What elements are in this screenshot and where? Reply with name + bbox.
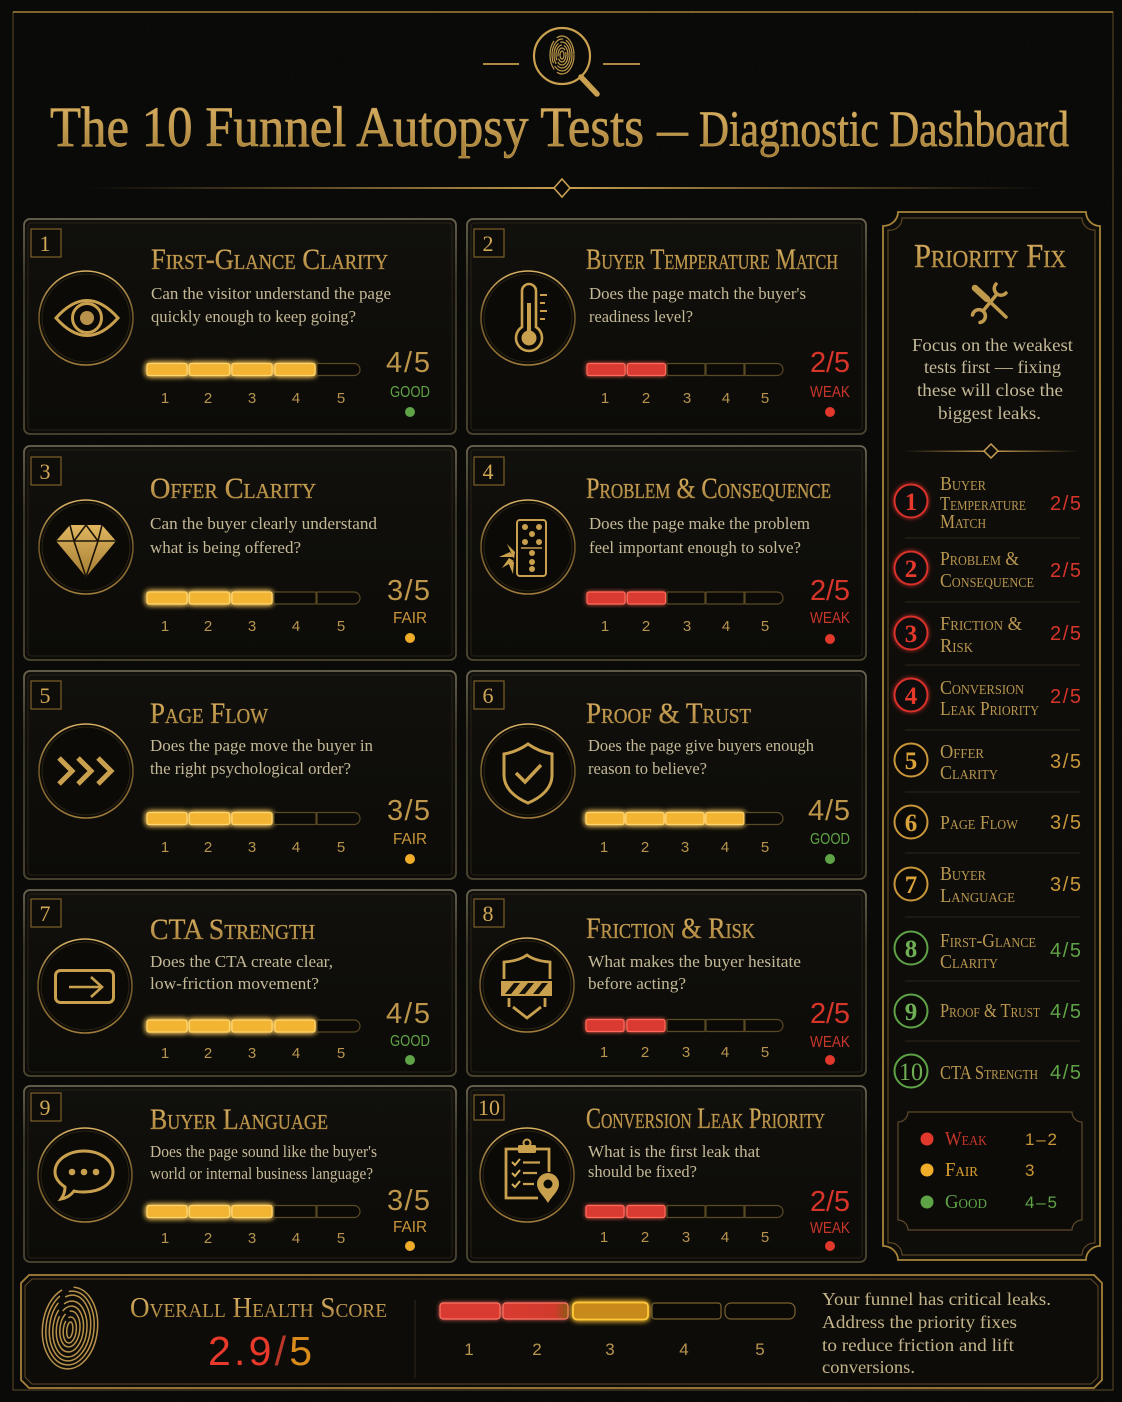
- score bar: 2: [204, 1230, 212, 1247]
- priority 3: [894, 613, 1081, 657]
- score bar: 2: [204, 839, 212, 856]
- priority 5: 3/5: [1050, 751, 1081, 773]
- heading: Friction & Risk: [586, 912, 755, 945]
- score: [387, 1185, 430, 1251]
- heading: Priority Fix: [914, 238, 1066, 275]
- score bar: 3: [248, 1230, 256, 1247]
- description: Does the CTA create clear,: [150, 952, 333, 971]
- heading: First-Glance Clarity: [151, 243, 388, 276]
- description: [589, 514, 810, 557]
- overall score bar: 3: [605, 1340, 615, 1359]
- score bar: 5: [337, 1045, 345, 1062]
- priority 9: [894, 994, 1081, 1028]
- card 1: First-Glance Clarity: [24, 219, 456, 434]
- priority 5: [894, 741, 1081, 784]
- score bar: 3: [682, 1044, 690, 1061]
- score bar: 5: [337, 390, 345, 407]
- priority 8: [894, 930, 1081, 973]
- score: 3/5: [387, 575, 430, 607]
- icon: crossed tools: [972, 284, 1006, 322]
- score: 2/5: [810, 347, 850, 379]
- summary text: [822, 1289, 1051, 1377]
- score bar: 4: [292, 1045, 300, 1062]
- icon: chevrons: [39, 724, 133, 818]
- heading: Buyer Temperature Match: [586, 243, 838, 276]
- overall score bar: 1: [464, 1340, 474, 1359]
- number badge: [474, 229, 504, 257]
- priority 7: Buyer: [940, 863, 987, 885]
- priority 6: Page Flow: [940, 812, 1019, 834]
- score bar: 3: [248, 1045, 256, 1062]
- priority 6: 6: [905, 810, 917, 837]
- card 10: Conversion Leak Priority: [467, 1086, 866, 1262]
- score bar: 3: [248, 618, 256, 635]
- score bar: [587, 592, 783, 635]
- priority 2: Consequence: [940, 570, 1034, 592]
- panel: overall health score: [21, 1275, 1102, 1388]
- priority 3: Risk: [940, 635, 973, 657]
- heading: Offer Clarity: [150, 472, 316, 505]
- score bar: 4: [292, 390, 300, 407]
- score: 4/5: [808, 795, 850, 827]
- score bar: 1: [600, 1044, 608, 1061]
- icon: fingerprint: [38, 1284, 102, 1372]
- priority 6: 3/5: [1050, 812, 1081, 834]
- description: Does the page sound like the buyer's: [150, 1142, 377, 1161]
- legend: Fair: [945, 1159, 979, 1181]
- score: FAIR: [393, 1219, 427, 1236]
- score: [386, 998, 430, 1065]
- score bar: 1: [601, 390, 609, 407]
- panel divider: [903, 444, 1080, 458]
- score: 3/5: [387, 1185, 430, 1217]
- score bar: 4: [721, 1044, 729, 1061]
- score bar: 1: [601, 618, 609, 635]
- score: 2/5: [810, 1186, 850, 1218]
- icon: clipboard with pin: [480, 1128, 574, 1222]
- score bar: [147, 592, 360, 635]
- title: The 10 Funnel Autopsy Tests: [50, 96, 644, 159]
- priority 2: Problem &: [940, 548, 1019, 570]
- priority 7: 7: [905, 872, 917, 899]
- overall score bar: 5: [755, 1340, 765, 1359]
- score: 2/5: [810, 998, 850, 1030]
- legend: Good: [945, 1191, 987, 1213]
- score bar: 5: [337, 839, 345, 856]
- score bar: 4: [722, 618, 730, 635]
- legend: Weak: [945, 1128, 987, 1150]
- description: world or internal business language?: [150, 1164, 373, 1183]
- title: —: [656, 102, 689, 158]
- score bar: 5: [337, 1230, 345, 1247]
- score bar: 3: [682, 1229, 690, 1246]
- score bar: [147, 364, 360, 407]
- priority 1: Match: [940, 511, 986, 533]
- description: what is being offered?: [150, 538, 301, 557]
- priority 10: 10: [899, 1059, 923, 1086]
- card 6: Proof & Trust: [467, 671, 866, 879]
- description: [151, 284, 391, 326]
- score bar: [586, 1206, 783, 1246]
- description: Does the page move the buyer in: [150, 736, 373, 755]
- score bar: 3: [248, 390, 256, 407]
- priority 4: 2/5: [1050, 686, 1081, 708]
- description: [588, 736, 815, 778]
- score bar: 4: [721, 839, 729, 856]
- score: [810, 998, 850, 1065]
- number badge: [31, 457, 61, 485]
- score bar: 4: [722, 390, 730, 407]
- score: 4/5: [386, 347, 430, 379]
- score: 2/5: [810, 575, 850, 607]
- score: FAIR: [393, 831, 427, 848]
- number badge: [31, 229, 61, 257]
- score bar: 2: [641, 1044, 649, 1061]
- score bar: 2: [204, 1045, 212, 1062]
- priority 7: 3/5: [1050, 874, 1081, 896]
- score bar: [586, 812, 783, 856]
- score bar: 1: [161, 1230, 169, 1247]
- description: should be fixed?: [588, 1162, 697, 1181]
- description: [588, 952, 801, 993]
- priority 9: Proof & Trust: [940, 1000, 1040, 1022]
- number badge: [31, 681, 61, 709]
- description: What is the first leak that: [588, 1142, 760, 1161]
- score bar: [147, 812, 360, 856]
- score bar: [587, 364, 783, 407]
- priority 8: 4/5: [1050, 940, 1081, 962]
- summary text: Your funnel has critical leaks.: [822, 1289, 1051, 1309]
- score bar: 3: [683, 390, 691, 407]
- description: feel important enough to solve?: [589, 538, 801, 557]
- description: [150, 736, 373, 778]
- description: [150, 514, 378, 557]
- heading: Buyer Language: [150, 1103, 328, 1136]
- priority 4: [894, 677, 1081, 720]
- summary text: Address the priority fixes: [822, 1312, 1017, 1332]
- score bar: [147, 1206, 360, 1247]
- legend: 4–5: [1025, 1193, 1057, 1212]
- score bar: 2: [204, 390, 212, 407]
- number badge: 6: [482, 683, 494, 708]
- priority 10: CTA Strength: [940, 1062, 1038, 1084]
- score bar: 2: [641, 839, 649, 856]
- score bar: 5: [337, 618, 345, 635]
- score bar: 2: [641, 1229, 649, 1246]
- priority 7: [894, 863, 1081, 907]
- title: [50, 96, 1069, 159]
- description: [150, 1142, 377, 1183]
- priority 9: 9: [905, 999, 917, 1026]
- number badge: [474, 681, 504, 709]
- priority 5: Offer: [940, 741, 985, 763]
- heading: Problem & Consequence: [586, 472, 831, 505]
- score: [810, 575, 850, 644]
- score: FAIR: [393, 610, 427, 627]
- heading: Page Flow: [150, 697, 268, 730]
- card 9: Buyer Language: [24, 1086, 456, 1262]
- overall score: 2.9/5: [208, 1328, 312, 1374]
- card 7: CTA Strength: [24, 890, 456, 1076]
- number badge: 5: [40, 683, 50, 708]
- description: What makes the buyer hesitate: [588, 952, 801, 971]
- priority 3: 2/5: [1050, 623, 1081, 645]
- number badge: 7: [40, 901, 50, 926]
- score: [387, 575, 430, 643]
- score bar: [586, 1020, 783, 1061]
- priority 10: [894, 1054, 1081, 1088]
- intro text: these will close the: [917, 380, 1063, 400]
- heading: Conversion Leak Priority: [586, 1102, 825, 1135]
- number badge: 2: [482, 231, 494, 256]
- description: the right psychological order?: [150, 759, 351, 778]
- priority 2: 2/5: [1050, 560, 1081, 582]
- priority 8: Clarity: [940, 951, 998, 973]
- score: GOOD: [390, 384, 430, 401]
- score: WEAK: [810, 1220, 850, 1237]
- card 5: Page Flow: [24, 671, 456, 879]
- score bar: 4: [292, 839, 300, 856]
- score: WEAK: [810, 384, 850, 401]
- score bar: 5: [761, 390, 769, 407]
- priority 2: [894, 548, 1081, 592]
- score bar: 5: [761, 1044, 769, 1061]
- priority 1: [894, 473, 1081, 533]
- score bar: 2: [642, 390, 650, 407]
- intro text: [912, 335, 1073, 423]
- panel: priority fix: [883, 212, 1100, 1260]
- card 2: Buyer Temperature Match: [467, 219, 866, 434]
- overall score bar: 2: [532, 1340, 542, 1359]
- priority 4: 4: [905, 683, 918, 710]
- score bar: 3: [683, 618, 691, 635]
- icon: speech bubble: [38, 1128, 132, 1222]
- description: Does the page match the buyer's: [589, 284, 806, 303]
- description: Does the page make the problem: [589, 514, 810, 533]
- description: [150, 952, 333, 993]
- description: low-friction movement?: [150, 974, 319, 993]
- score: [386, 347, 430, 417]
- number badge: 8: [482, 901, 494, 926]
- heading: Overall Health Score: [130, 1293, 387, 1324]
- description: reason to believe?: [588, 759, 707, 778]
- intro text: tests first — fixing: [924, 357, 1061, 377]
- score bar: 1: [161, 1045, 169, 1062]
- number badge: [474, 899, 504, 927]
- priority 1: 1: [905, 489, 917, 516]
- priority 9: 4/5: [1050, 1001, 1081, 1023]
- description: [588, 1142, 760, 1181]
- score: 3/5: [387, 795, 430, 827]
- score: [810, 347, 850, 417]
- score: GOOD: [810, 831, 850, 848]
- score bar: 2: [642, 618, 650, 635]
- score bar: 4: [721, 1229, 729, 1246]
- overall score bar: [440, 1302, 795, 1359]
- legend: [898, 1112, 1082, 1230]
- score bar: 4: [292, 1230, 300, 1247]
- priority 1: Buyer: [940, 473, 987, 495]
- legend: 1–2: [1025, 1130, 1057, 1149]
- priority 8: First-Glance: [940, 930, 1036, 952]
- score: WEAK: [810, 1034, 850, 1051]
- score: WEAK: [810, 610, 850, 627]
- description: readiness level?: [589, 307, 693, 326]
- score: [387, 795, 430, 864]
- description: Does the page give buyers enough: [588, 736, 815, 755]
- icon: fingerprint magnifier: [483, 28, 640, 94]
- number badge: 9: [40, 1095, 50, 1120]
- priority 1: Temperature: [940, 493, 1026, 515]
- score: [810, 1186, 850, 1251]
- score bar: 4: [292, 618, 300, 635]
- score bar: 5: [761, 618, 769, 635]
- legend: 3: [1025, 1161, 1034, 1180]
- icon: shield with barrier: [480, 938, 574, 1032]
- score bar: 1: [161, 390, 169, 407]
- summary text: conversions.: [822, 1357, 915, 1377]
- score bar: 3: [681, 839, 689, 856]
- number badge: 3: [40, 459, 50, 484]
- score bar: 1: [161, 618, 169, 635]
- priority 2: 2: [905, 556, 917, 583]
- priority 4: Leak Priority: [940, 698, 1039, 720]
- number badge: 1: [40, 231, 50, 256]
- icon: shield with check: [481, 724, 575, 818]
- priority 5: 5: [905, 748, 917, 775]
- intro text: Focus on the weakest: [912, 335, 1073, 355]
- header divider: [85, 179, 1046, 197]
- icon: arrow button: [38, 939, 132, 1033]
- intro text: biggest leaks.: [938, 403, 1041, 423]
- number badge: 4: [482, 459, 494, 484]
- description: Can the visitor understand the page: [151, 284, 391, 303]
- priority 1: 2/5: [1050, 493, 1081, 515]
- priority 3: Friction &: [940, 613, 1022, 635]
- score bar: 5: [761, 1229, 769, 1246]
- priority 10: 4/5: [1050, 1062, 1081, 1084]
- description: before acting?: [588, 974, 686, 993]
- score bar: [147, 1020, 360, 1062]
- card 3: Offer Clarity: [24, 446, 456, 660]
- icon: thermometer: [481, 271, 575, 365]
- heading: Proof & Trust: [586, 697, 751, 730]
- summary text: to reduce friction and lift: [822, 1335, 1014, 1355]
- overall score bar: 4: [679, 1340, 689, 1359]
- priority 5: Clarity: [940, 762, 998, 784]
- score: [808, 795, 850, 864]
- icon: falling domino: [481, 500, 575, 594]
- priority 3: 3: [905, 621, 917, 648]
- card 4: Problem & Consequence: [467, 446, 866, 660]
- description: [589, 284, 806, 326]
- icon: eye: [39, 271, 133, 365]
- priority 8: 8: [905, 936, 917, 963]
- score bar: 1: [600, 839, 608, 856]
- score: 4/5: [386, 998, 430, 1030]
- number badge: [31, 899, 61, 927]
- number badge: [31, 1093, 61, 1121]
- score bar: 2: [204, 618, 212, 635]
- icon: diamond: [39, 500, 133, 594]
- card 8: Friction & Risk: [467, 890, 866, 1076]
- number badge: 10: [478, 1095, 500, 1120]
- description: Can the buyer clearly understand: [150, 514, 378, 533]
- score bar: 5: [761, 839, 769, 856]
- priority 4: Conversion: [940, 677, 1024, 699]
- heading: CTA Strength: [150, 913, 315, 946]
- score: GOOD: [390, 1033, 430, 1050]
- number badge: [474, 457, 504, 485]
- priority 7: Language: [940, 885, 1015, 907]
- score bar: 3: [248, 839, 256, 856]
- priority 6: [894, 806, 1081, 838]
- score bar: 1: [161, 839, 169, 856]
- description: quickly enough to keep going?: [151, 307, 356, 326]
- score bar: 1: [600, 1229, 608, 1246]
